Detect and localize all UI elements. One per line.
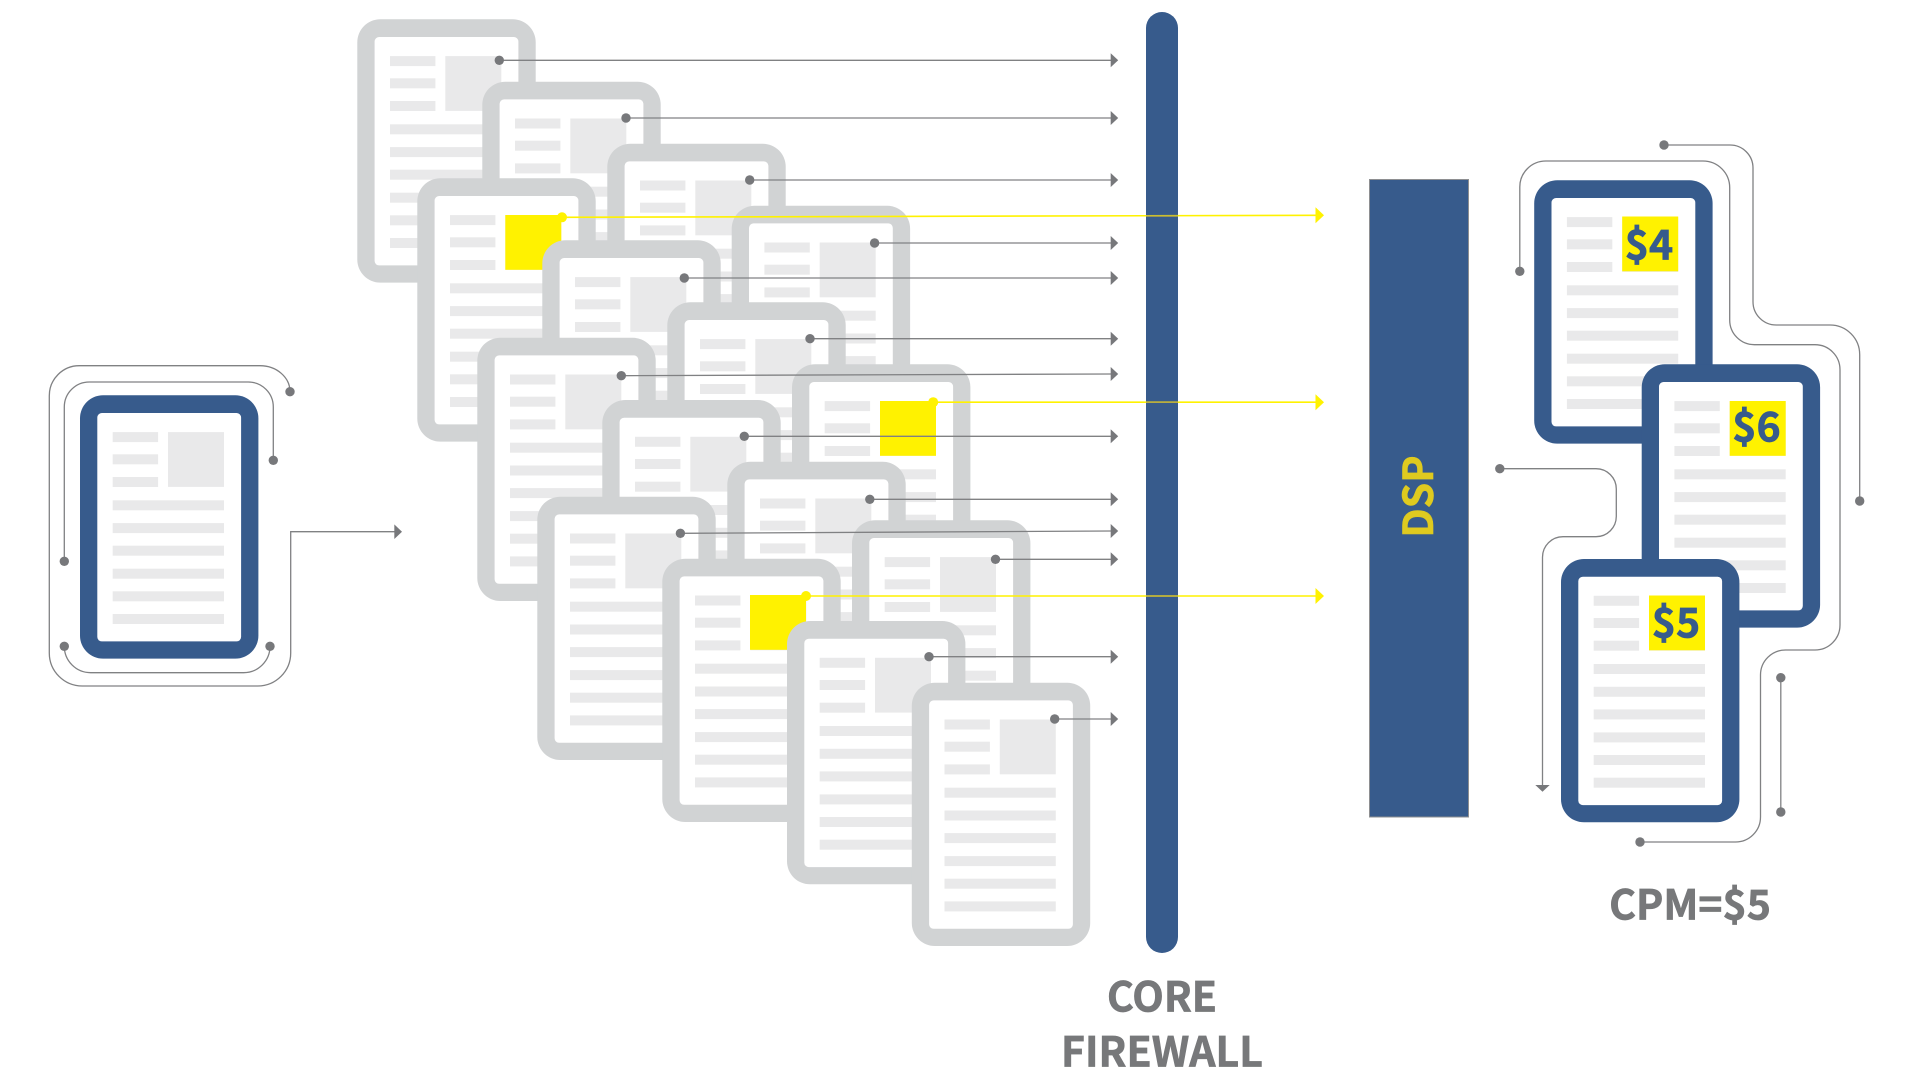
blocked gray arrows [495, 53, 1118, 726]
heading: core firewall label: CORE [1107, 964, 1217, 1024]
passing yellow arrows [557, 207, 1324, 604]
page 2 [482, 82, 661, 345]
yellow arrow 1 [557, 207, 1324, 223]
page 11 [727, 462, 906, 725]
source page with connectors [49, 366, 402, 686]
page 7 [667, 302, 846, 566]
page 8 with yellow ad [792, 364, 970, 628]
arrow 12 [924, 650, 1118, 664]
stack of gray pages [357, 19, 1090, 946]
arrow 5 [680, 271, 1118, 285]
connector: winding path around bids [1515, 161, 1840, 847]
page 3 [607, 144, 786, 407]
page 16 [912, 683, 1090, 946]
arrow 11 [991, 552, 1118, 566]
page 9 [477, 338, 656, 601]
page 14 with yellow ad [662, 559, 841, 822]
bid page $5 [1561, 559, 1739, 822]
connector: DSP to bid arrow [1495, 464, 1616, 792]
page 12 [852, 520, 1030, 784]
connector: short vertical [1776, 673, 1786, 817]
heading: core firewall label [1061, 964, 1263, 1079]
bid page $4 [1534, 180, 1713, 444]
connector: outer loop with arrow [49, 366, 402, 686]
arrow 9 [865, 492, 1118, 506]
bid page $6: $6 [1732, 394, 1781, 454]
arrow 8 [740, 429, 1118, 443]
yellow arrow 2 [928, 394, 1324, 410]
bid page $5: $5 [1652, 589, 1700, 649]
page 1 [357, 19, 536, 283]
page 4 [732, 206, 910, 469]
heading: core firewall label: FIREWALL [1061, 1019, 1263, 1079]
icon: source page [80, 395, 258, 659]
arrow 3 [745, 173, 1118, 187]
page 13 [537, 497, 716, 760]
bid page $4: $4 [1625, 211, 1673, 271]
DSP label: DSP [1385, 455, 1445, 538]
page 10 [602, 400, 781, 663]
page 5 with yellow ad [417, 178, 596, 442]
arrow 7 [617, 367, 1118, 381]
arrow 6 [805, 332, 1118, 346]
core firewall bar [1146, 12, 1178, 953]
arrow 4 [870, 236, 1118, 250]
arrow 1 [495, 53, 1118, 67]
DSP panel [1370, 180, 1468, 817]
page 15 [787, 621, 965, 884]
yellow arrow 3 [801, 588, 1324, 604]
connector: inner loop [60, 382, 278, 566]
bid pages with prices [1534, 180, 1820, 822]
connector: bottom loop [60, 642, 275, 673]
connector: top right long path [1659, 140, 1864, 506]
label: CPM price: CPM=$5 [1609, 871, 1771, 931]
arrow 13 [1050, 712, 1118, 726]
page 6 [542, 240, 721, 504]
bid page $6 [1642, 364, 1820, 628]
arrow 10 [676, 524, 1118, 538]
arrow 2 [621, 111, 1118, 125]
